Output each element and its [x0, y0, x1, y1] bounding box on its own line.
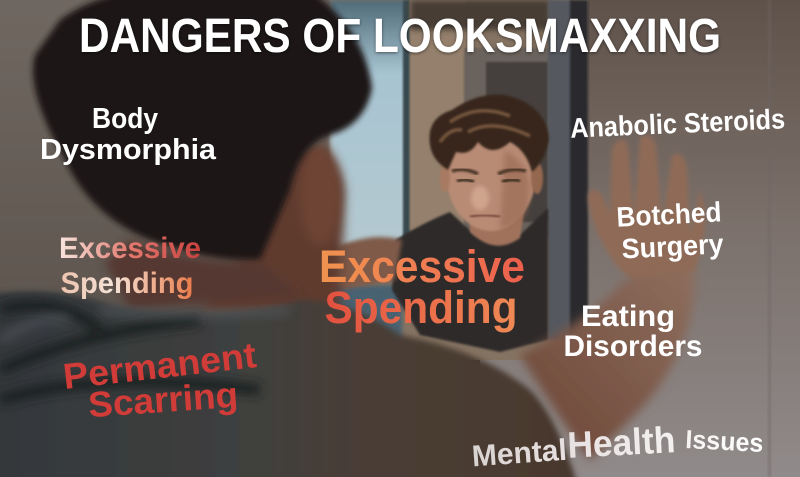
neck [200, 148, 345, 310]
label: permanent scarring [61, 334, 258, 425]
hand on the mirror [588, 135, 705, 300]
label: mental health issues: Issues [685, 424, 764, 458]
left wall [0, 0, 340, 477]
shirt folds [0, 306, 260, 400]
label: body dysmorphia [40, 103, 217, 166]
upper neck skin at the collar [105, 240, 300, 310]
mirror pillar [548, 0, 572, 340]
label: mental health issues: Mental [471, 434, 568, 473]
reflected hair [429, 95, 549, 172]
label: botched surgery: Botched [616, 196, 722, 233]
label: body dysmorphia: Dysmorphia [40, 134, 217, 166]
reflected shaded cheek [500, 150, 530, 228]
reflected nose and mouth [471, 186, 489, 210]
label: excessive spending (center): Excessive [319, 241, 525, 292]
label: botched surgery [616, 196, 725, 265]
label: permanent scarring: Scarring [87, 374, 239, 425]
label: mental health issues: Health [566, 419, 676, 466]
label: excessive spending (left): Excessive [59, 232, 201, 265]
label: eating disorders: Disorders [564, 330, 702, 363]
label: mental health issues [471, 419, 764, 473]
label: excessive spending (left): Spending [60, 267, 194, 300]
label: body dysmorphia: Body [92, 103, 158, 135]
reflected neck and face [470, 205, 525, 246]
ear [300, 145, 340, 245]
reflected arm [340, 237, 402, 290]
label: eating disorders: Eating [581, 300, 675, 333]
label: botched surgery: Surgery [621, 228, 725, 265]
label: excessive spending (center): Spending [324, 282, 518, 333]
reflected brows and eyes [452, 170, 526, 174]
right wall [480, 0, 800, 477]
label: excessive spending (center) [319, 241, 525, 333]
label: excessive spending (left) [59, 232, 201, 300]
reflected shirt [392, 208, 548, 352]
mirror reflection scene [330, 0, 588, 360]
label: permanent scarring: Permanent [61, 334, 258, 397]
label: eating disorders [564, 300, 702, 363]
forearm [520, 270, 695, 460]
head hair, back view [33, 0, 372, 261]
wall seam [768, 0, 771, 477]
reflected window lower area [332, 285, 402, 340]
shirt back and shoulders [0, 292, 582, 477]
title: DANGERS OF LOOKSMAXXING [79, 10, 721, 63]
